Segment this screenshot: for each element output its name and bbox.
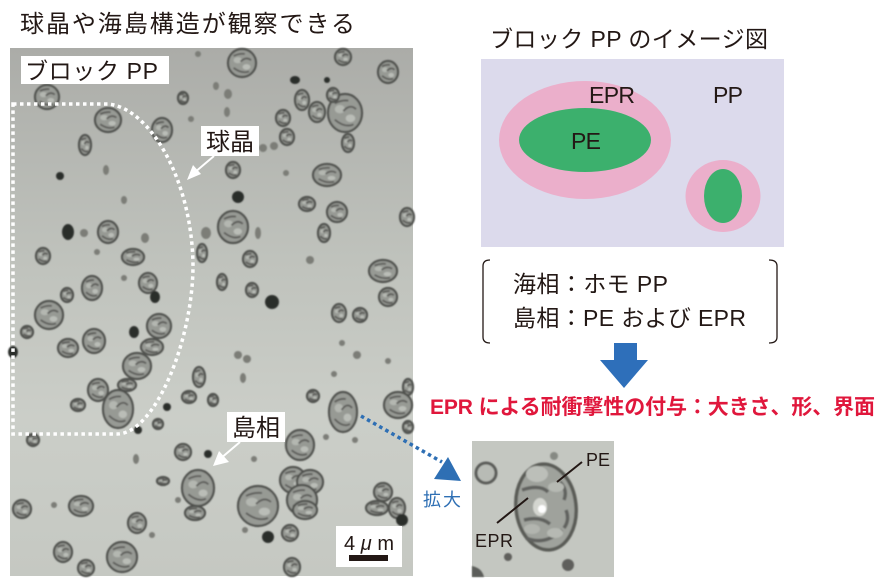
dotted region outline — [13, 104, 193, 434]
large domain: PE — [571, 128, 601, 154]
bracketed legend: 海相：ホモ PP — [513, 271, 668, 297]
dotted zoom arrow — [361, 416, 461, 481]
callout: spherulite — [187, 126, 259, 180]
diagram heading: ブロック PP のイメージ図 — [490, 26, 768, 52]
scale bar — [336, 526, 402, 567]
inset micrograph — [472, 441, 614, 577]
bracketed legend — [483, 260, 777, 343]
callout: island phase — [213, 412, 285, 466]
large domain — [499, 81, 671, 199]
bracketed legend: 島相：PE および EPR — [513, 305, 746, 331]
label PP: PP — [713, 82, 743, 108]
inset label PE: PE — [586, 450, 610, 470]
conclusion text: EPR による耐衝撃性の付与：大きさ、形、界面 — [430, 396, 875, 419]
diagram: block PP schematic — [481, 59, 784, 247]
scale bar: 4 μ m — [344, 533, 394, 555]
callout: spherulite: 球晶 — [206, 129, 254, 156]
title: 球晶や海島構造が観察できる — [20, 11, 355, 38]
inset label PE — [557, 450, 610, 482]
callout: island phase: 島相 — [232, 415, 280, 442]
inset label EPR — [475, 498, 528, 551]
micrograph: block PP — [8, 48, 414, 576]
down arrow — [600, 343, 648, 388]
inset label EPR: EPR — [475, 531, 513, 551]
small domain — [686, 160, 760, 232]
label: magnified: 拡大 — [423, 490, 461, 510]
large domain: EPR — [589, 82, 635, 108]
label: block PP: ブロック PP — [25, 58, 158, 84]
